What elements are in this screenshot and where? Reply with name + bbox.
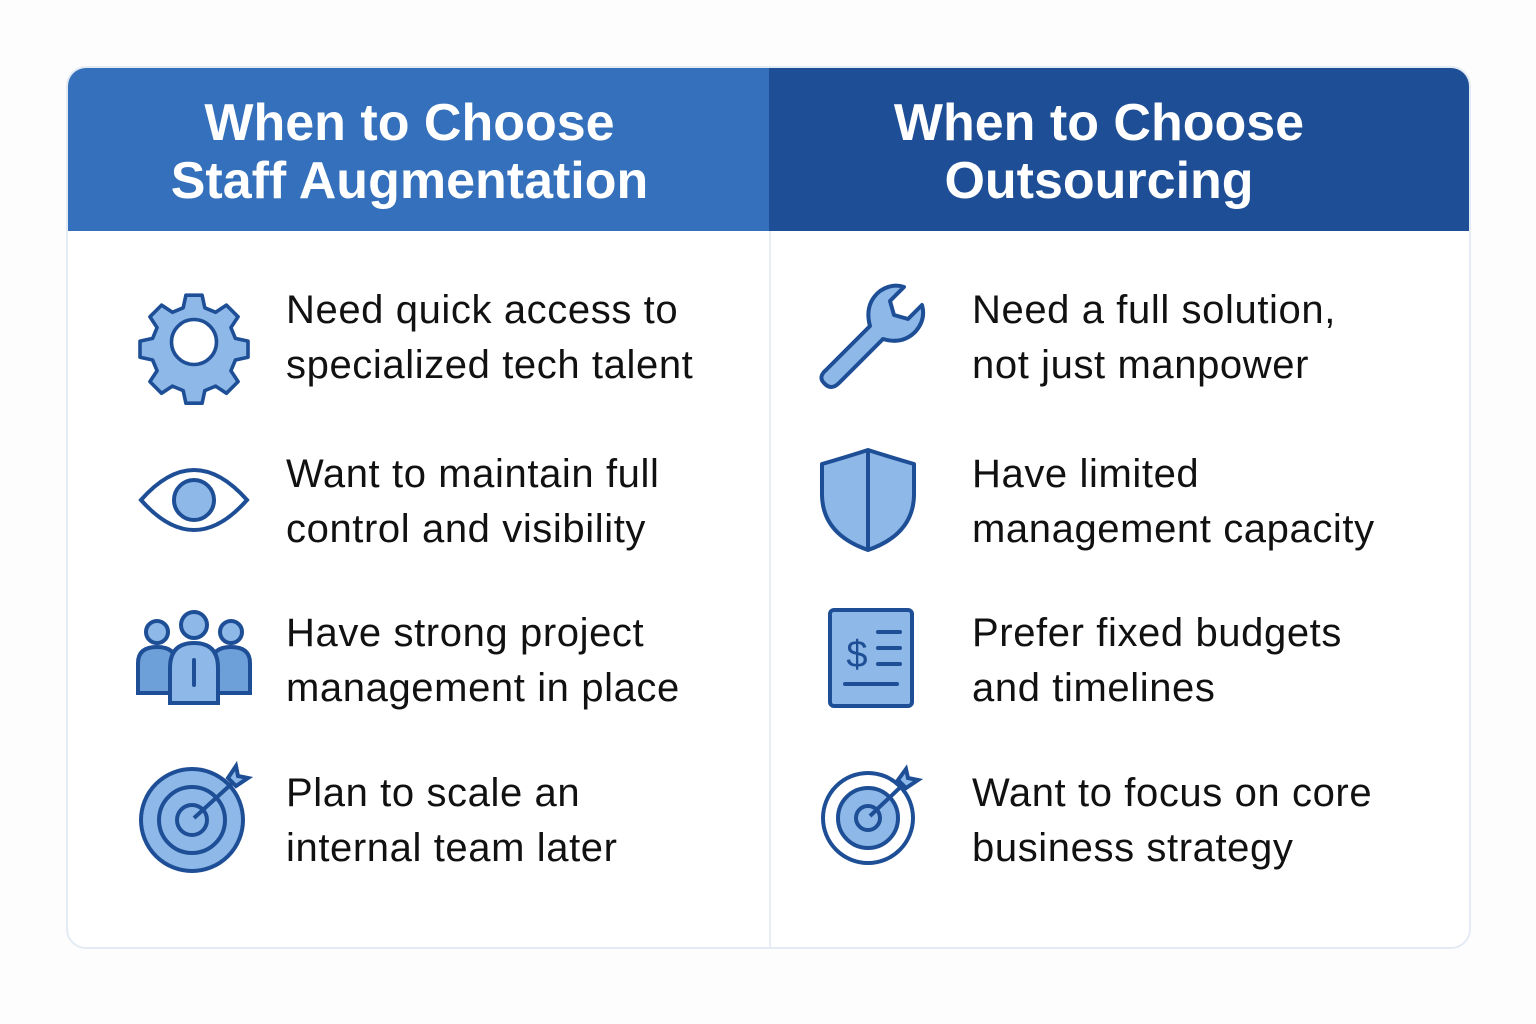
icon: people	[136, 610, 252, 705]
header: staff augmentation: When to Choose	[204, 94, 615, 152]
header: staff augmentation: Staff Augmentation	[171, 152, 648, 210]
text: scale: internal team later	[286, 826, 618, 870]
header: staff augmentation	[68, 68, 769, 231]
text: core strategy: Want to focus on core	[972, 771, 1372, 815]
text: full solution: not just manpower	[972, 343, 1309, 387]
text: full solution: Need a full solution,	[972, 288, 1336, 332]
icon: shield	[820, 448, 916, 552]
text: project mgmt: management in place	[286, 666, 680, 710]
icon: eye	[138, 468, 250, 532]
text: limited mgmt: Have limited	[972, 452, 1199, 496]
text: limited mgmt: management capacity	[972, 507, 1375, 551]
card	[66, 66, 1471, 949]
header: outsourcing: Outsourcing	[944, 152, 1254, 210]
text: fixed budgets: Prefer fixed budgets	[972, 611, 1342, 655]
text: full solution	[972, 288, 1336, 387]
icon: target	[139, 761, 253, 873]
text: $	[846, 634, 868, 676]
text: scale	[286, 771, 618, 870]
icon: budget document	[828, 608, 914, 708]
icon: gear	[138, 284, 916, 861]
text: control	[286, 452, 660, 551]
text: scale: Plan to scale an	[286, 771, 580, 815]
text: control: Want to maintain full	[286, 452, 660, 496]
header: outsourcing: When to Choose	[894, 94, 1304, 152]
text: fixed budgets: and timelines	[972, 666, 1215, 710]
text: fixed budgets	[972, 611, 1342, 710]
icon: wrench	[819, 284, 926, 389]
text: quick access	[286, 288, 693, 387]
text: project mgmt: Have strong project	[286, 611, 644, 655]
text: core strategy	[972, 771, 1372, 870]
icon: target 2	[821, 764, 923, 865]
text: control: control and visibility	[286, 507, 646, 551]
text: quick access: Need quick access to	[286, 288, 678, 332]
text: project mgmt	[286, 611, 680, 710]
text: core strategy: business strategy	[972, 826, 1293, 870]
text: limited mgmt	[972, 452, 1375, 551]
header: outsourcing	[769, 68, 1469, 231]
text: quick access: specialized tech talent	[286, 343, 693, 387]
